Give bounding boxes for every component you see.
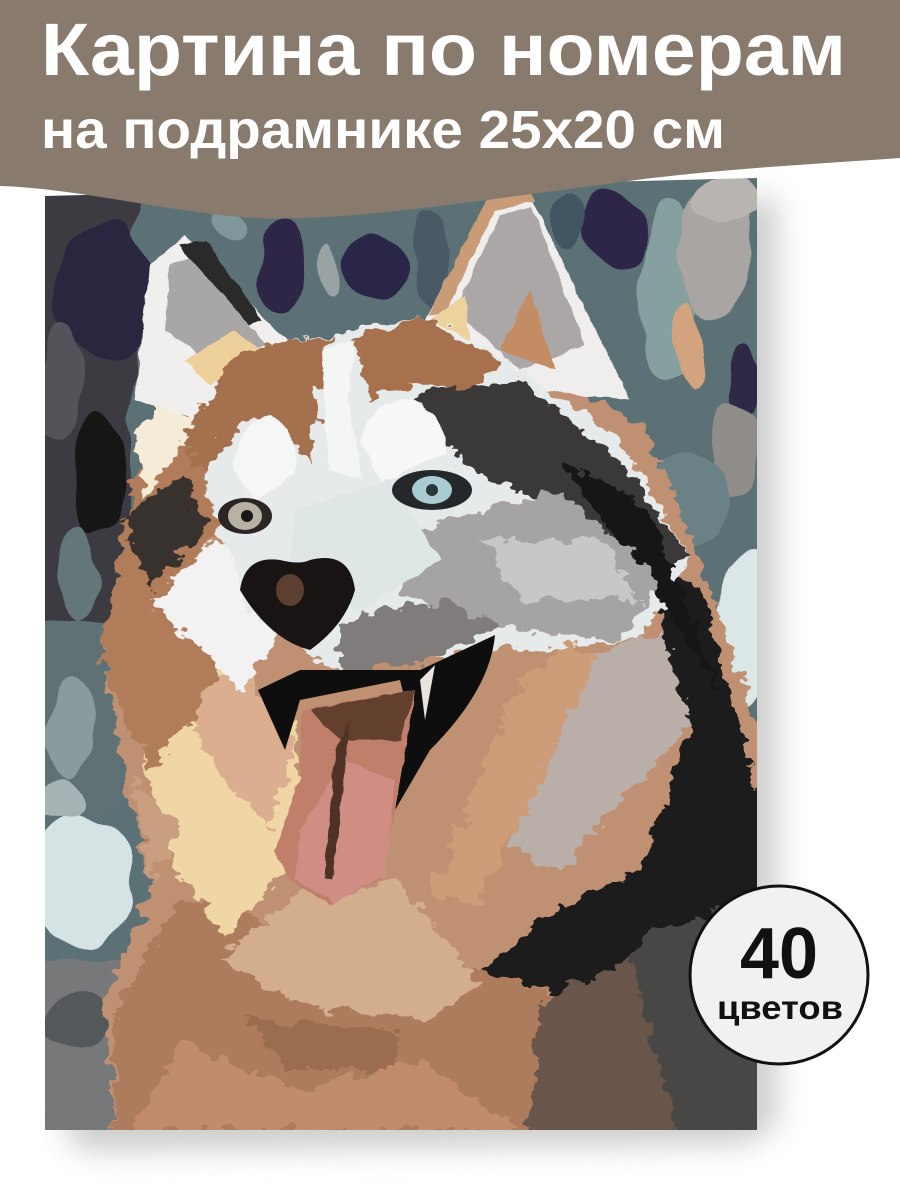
- banner: [0, 0, 900, 219]
- badge label: цветов: [717, 989, 843, 1026]
- eye: left: [218, 498, 272, 534]
- white eye patches and blaze: [233, 340, 446, 610]
- painting background: [45, 178, 757, 1130]
- tongue: [275, 690, 415, 905]
- mouth: [258, 635, 495, 810]
- head: [180, 315, 720, 690]
- subtitle: на подрамнике 25х20 см: [41, 100, 725, 160]
- ear: left: [135, 235, 290, 420]
- fur: left cheek: [96, 406, 277, 772]
- badge: 40 colours: [690, 886, 868, 1064]
- eye: right: [392, 470, 472, 510]
- nose: [240, 558, 355, 650]
- fur: body: [100, 340, 770, 1140]
- title: Картина по номерам: [41, 8, 846, 91]
- ear: right: [425, 192, 630, 400]
- badge number: 40: [740, 914, 818, 994]
- painting: husky dog: [45, 178, 757, 1130]
- canvas shadow: [60, 190, 778, 1152]
